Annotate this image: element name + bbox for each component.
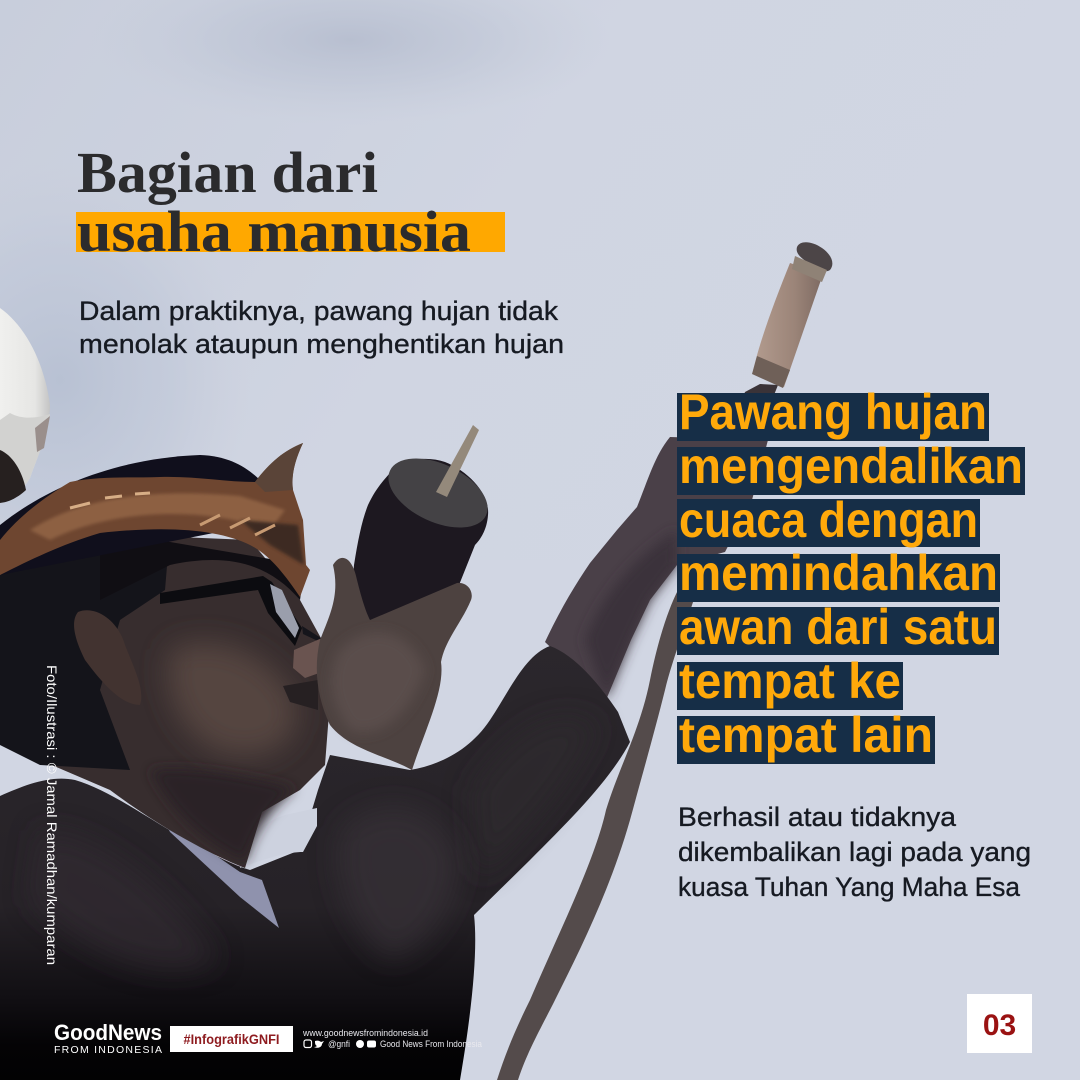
callout: navy highlighted statement: cuaca dengan	[679, 492, 978, 548]
callout: navy highlighted statement: tempat ke	[679, 653, 901, 709]
ear	[74, 610, 141, 705]
hand holding the horn	[317, 558, 472, 770]
social links: @gnfi	[328, 1039, 350, 1049]
logo: GoodNews From Indonesia: FROM INDONESIA	[54, 1044, 162, 1056]
intro text: menolak ataupun menghentikan hujan	[79, 329, 564, 359]
staff: upper handle	[678, 242, 832, 570]
horn instrument	[354, 425, 498, 625]
callout: navy highlighted statement: Pawang hujan	[679, 384, 987, 440]
head: face and neck	[0, 530, 330, 868]
callout: navy highlighted statement: memindahkan	[679, 545, 998, 601]
icon: youtube	[367, 1040, 376, 1048]
callout: navy highlighted statement: mengendalikan	[679, 438, 1023, 494]
closing text: kuasa Tuhan Yang Maha Esa	[678, 872, 1021, 902]
intro text	[79, 296, 564, 359]
photo: rain handler figure	[0, 242, 832, 1080]
logo: GoodNews From Indonesia	[54, 1020, 162, 1056]
callout: navy highlighted statement	[677, 384, 1025, 764]
icon: facebook	[356, 1040, 364, 1048]
closing text: Berhasil atau tidaknya	[678, 802, 957, 832]
intro text: Dalam praktiknya, pawang hujan tidak	[79, 296, 559, 326]
logo: GoodNews From Indonesia: GoodNews	[54, 1020, 162, 1045]
batik headband and hat	[0, 443, 310, 597]
sky gap between neck and sleeve	[240, 808, 317, 868]
clothing: torso and raised sleeve	[0, 646, 630, 1080]
glasses	[160, 576, 321, 646]
helmet of a bystander	[0, 308, 50, 503]
social links: www.goodnewsfromindonesia.id	[302, 1028, 428, 1038]
page number badge: 03	[983, 1009, 1016, 1042]
nose and moustache	[293, 638, 322, 678]
icon: twitter	[314, 1041, 324, 1048]
icon: instagram	[304, 1040, 312, 1048]
hashtag badge: #InfografikGNFI	[184, 1032, 280, 1047]
social links	[302, 1028, 482, 1049]
social links: Good News From Indonesia	[380, 1039, 482, 1049]
forearm and hand gripping the staff	[545, 437, 768, 700]
photo credit: Foto/Ilustrasi : © Jamal Ramadhan/kumparan	[44, 665, 60, 965]
staff: lower shaft	[497, 580, 700, 1080]
hashtag badge	[170, 1026, 293, 1052]
closing text: dikembalikan lagi pada yang	[678, 837, 1031, 867]
page number badge	[967, 994, 1032, 1053]
callout: navy highlighted statement: awan dari satu	[679, 599, 997, 655]
closing text	[678, 802, 1031, 902]
heading	[76, 140, 505, 264]
heading highlight bar	[76, 212, 505, 252]
heading line 2: usaha manusia	[77, 199, 471, 264]
heading line 1: Bagian dari	[77, 140, 378, 205]
callout: navy highlighted statement: tempat lain	[679, 707, 933, 763]
